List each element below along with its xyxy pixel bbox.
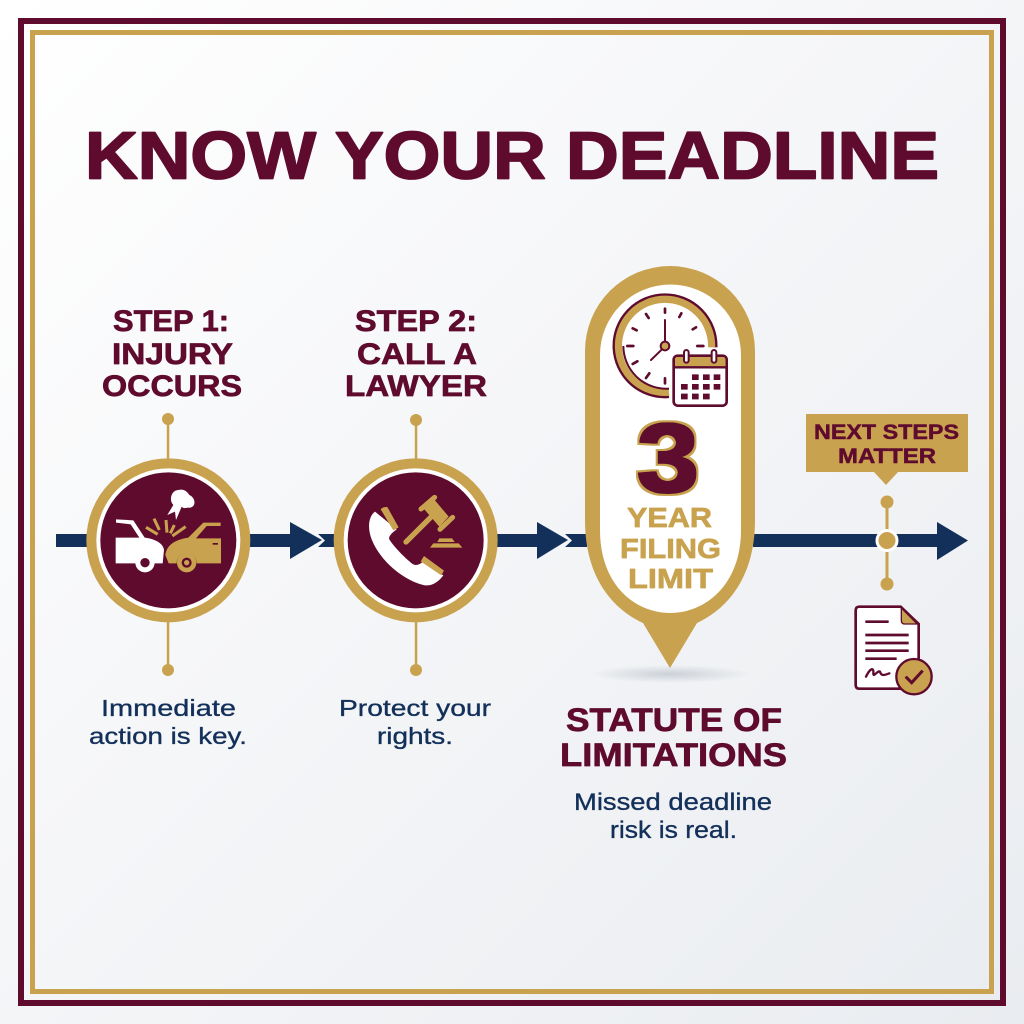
step 2 heading: STEP 2: bbox=[355, 305, 477, 338]
step 2 heading: LAWYER bbox=[345, 370, 487, 403]
step 2 badge: phone and gavel icon bbox=[334, 458, 498, 622]
year filing limit text bbox=[620, 502, 721, 594]
timeline arrow bbox=[56, 522, 968, 560]
statute of limitations heading: LIMITATIONS bbox=[560, 737, 787, 773]
number 3: 3 bbox=[637, 404, 699, 513]
next steps connector bbox=[877, 496, 897, 590]
title: KNOW YOUR DEADLINE bbox=[85, 118, 939, 194]
step 1 heading: OCCURS bbox=[102, 370, 242, 403]
step 1 heading bbox=[102, 305, 242, 403]
step 1 heading: INJURY bbox=[112, 338, 233, 371]
next steps callout: MATTER bbox=[838, 444, 937, 468]
statute description bbox=[574, 789, 772, 844]
statute of limitations heading: STATUTE OF bbox=[566, 702, 782, 738]
deadline pin bbox=[585, 266, 755, 668]
step 1 badge: car crash icon bbox=[86, 458, 250, 622]
step 2 heading: CALL A bbox=[357, 338, 477, 371]
pin shadow bbox=[590, 665, 750, 683]
icon: signed document with check bbox=[856, 607, 932, 694]
next steps callout: NEXT STEPS bbox=[814, 420, 959, 444]
step 2 description: rights. bbox=[377, 723, 453, 749]
statute description: risk is real. bbox=[610, 817, 737, 844]
step 2 description bbox=[339, 695, 491, 749]
year filing limit text: YEAR bbox=[627, 502, 712, 533]
year filing limit text: LIMIT bbox=[628, 563, 713, 594]
statute of limitations heading bbox=[560, 702, 787, 773]
icon: clock and calendar bbox=[614, 294, 729, 409]
step 2 connector bbox=[410, 414, 422, 676]
step 1 description: Immediate bbox=[101, 695, 236, 721]
statute description: Missed deadline bbox=[574, 789, 772, 816]
year filing limit text: FILING bbox=[620, 533, 721, 564]
step 1 connector bbox=[162, 413, 174, 676]
next steps callout bbox=[806, 414, 968, 485]
step 1 description bbox=[89, 695, 247, 749]
step 1 heading: STEP 1: bbox=[113, 305, 229, 338]
step 2 heading bbox=[345, 305, 487, 403]
step 2 description: Protect your bbox=[339, 695, 491, 721]
step 1 description: action is key. bbox=[89, 723, 247, 749]
